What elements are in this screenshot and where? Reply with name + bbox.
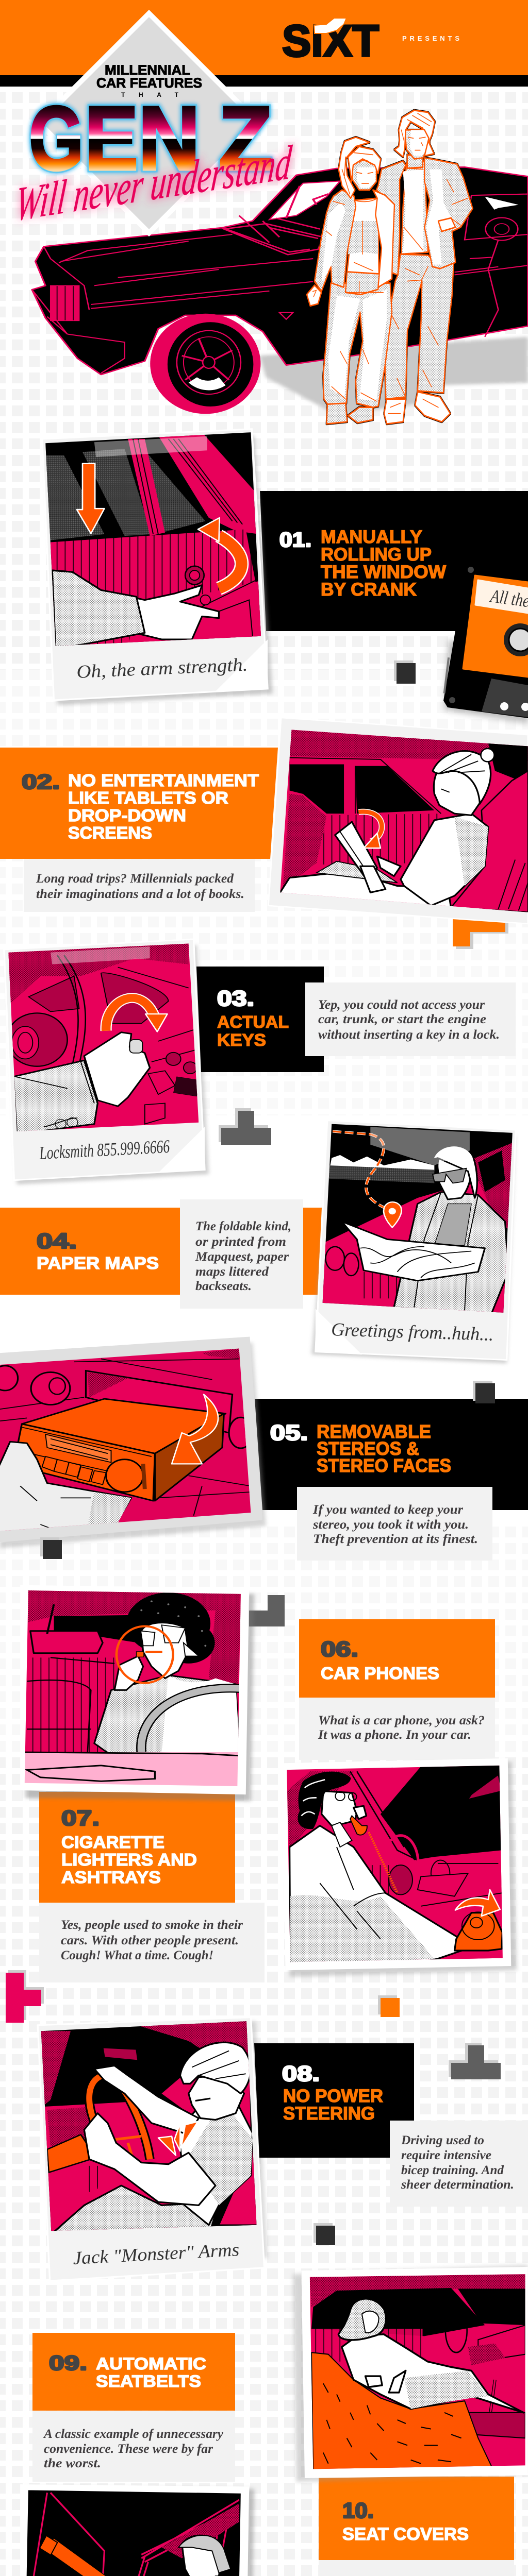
title small text: MILLENNIAL <box>105 62 190 78</box>
GEN Z: N <box>138 88 200 189</box>
black title box 08: 08. <box>282 2061 320 2086</box>
Will never understand <box>13 135 294 231</box>
black title box 05 <box>255 1399 528 1510</box>
black title box 03: KEYS <box>217 1030 266 1049</box>
black title box 05: STEREO FACES <box>317 1455 451 1476</box>
map <box>342 1222 485 1281</box>
orange title box: LIKE TABLETS OR <box>68 788 228 807</box>
shirt <box>94 1675 240 1755</box>
black title box: 01. <box>279 529 311 551</box>
seat <box>451 771 528 912</box>
black title box 08: STEERING <box>283 2104 375 2124</box>
belt <box>42 2538 167 2576</box>
orange title box 10 <box>319 2477 514 2560</box>
steering wheel <box>141 1688 242 1752</box>
description 07: Cough! What a time. Cough! <box>61 1948 213 1962</box>
GEN Z: E <box>85 88 138 189</box>
orange title box 10: SEAT COVERS <box>342 2524 469 2544</box>
fur cover <box>311 2352 491 2471</box>
title block <box>13 13 294 233</box>
header band <box>0 0 528 87</box>
description 05 <box>297 1487 492 1561</box>
photo 09 <box>20 2484 254 2576</box>
orange band 04 <box>0 1208 322 1295</box>
title small text: THAT <box>121 91 179 98</box>
description 06: What is a car phone, you ask? <box>318 1714 485 1727</box>
man legs and body <box>51 2185 219 2235</box>
black title box 08: NO POWER <box>283 2086 383 2106</box>
book <box>335 822 377 878</box>
icon: dark square bottom <box>40 1537 62 1559</box>
shirt <box>290 1826 462 1964</box>
orange title box 09: AUTOMATIC <box>96 2354 206 2373</box>
orange band 04: 04. <box>37 1229 77 1253</box>
orange title box <box>0 748 278 859</box>
black title box 05: 05. <box>270 1420 308 1445</box>
black title box 08 <box>254 2043 414 2158</box>
description 05: Theft prevention at its finest. <box>313 1532 478 1546</box>
description 04: The foldable kind, <box>195 1219 291 1233</box>
icon: dark square <box>314 2223 335 2245</box>
orange column <box>47 2134 96 2173</box>
panel 04: paper maps <box>0 1121 516 1364</box>
icon: pink tetris piece <box>6 1970 44 2023</box>
Will never understand: Will never understand <box>13 135 294 231</box>
panel 09: automatic seatbelts <box>20 2333 254 2576</box>
icon: small dark square <box>394 660 416 684</box>
panel 05: removable stereos <box>0 1337 528 1561</box>
panel 07: cigarette lighters and ashtrays <box>6 1585 265 2023</box>
icon: grey tetris T <box>219 1108 271 1145</box>
title small text <box>96 62 202 98</box>
hand with lighter <box>114 1656 143 1690</box>
icon: grey tetris T <box>449 2043 501 2079</box>
title small text: CAR FEATURES <box>96 75 202 91</box>
GEN Z: G <box>29 88 84 189</box>
description 10 <box>319 2560 514 2576</box>
caption 03: Locksmith 855.999.6666 <box>39 1136 170 1163</box>
torso <box>401 814 488 906</box>
description 05: stereo, you took it with you. <box>312 1518 469 1532</box>
arrow <box>172 1394 218 1464</box>
arms <box>94 2065 199 2134</box>
orange title box 09: 09. <box>49 2352 87 2375</box>
strain burst <box>158 2122 198 2155</box>
GEN Z: E <box>85 88 138 189</box>
description 09: the worst. <box>44 2456 101 2470</box>
photo 06 <box>280 1758 517 1977</box>
head <box>189 2075 244 2120</box>
description 03: car, trunk, or start the engine <box>318 1012 486 1026</box>
woman <box>342 2334 523 2413</box>
car body <box>32 167 528 375</box>
photo 10 <box>293 2265 528 2482</box>
orange title box 09 <box>32 2333 235 2411</box>
panel 10: seat covers <box>293 2265 528 2576</box>
description 07 <box>39 1903 265 1982</box>
GEN Z: N <box>138 88 200 189</box>
black title box 03: ACTUAL <box>217 1012 289 1031</box>
black title box: ROLLING UP <box>321 545 432 565</box>
orange title box 06: 06. <box>321 1637 358 1661</box>
legs <box>280 873 451 909</box>
rotary phone <box>455 1913 502 1951</box>
arm <box>52 570 219 646</box>
orange title box 06: CAR PHONES <box>321 1664 439 1683</box>
hero illustration: couple <box>307 110 473 424</box>
GEN Z: G <box>29 88 84 189</box>
panel 06: car phones <box>249 1595 517 1977</box>
description 03: without inserting a key in a lock. <box>318 1028 500 1042</box>
cassette tape <box>443 564 528 723</box>
icon: orange square <box>378 1995 400 2017</box>
description 09: convenience. These were by far <box>44 2442 213 2456</box>
phone receiver <box>350 1816 367 1835</box>
description 08: require intensive <box>401 2148 491 2162</box>
description 08: Driving used to <box>401 2133 484 2147</box>
description 02 <box>24 859 255 912</box>
black title box 03 <box>196 967 324 1072</box>
orange title box: 02. <box>22 771 60 793</box>
black title box: BY CRANK <box>321 580 417 600</box>
description 05: If you wanted to keep your <box>312 1503 463 1517</box>
photo 01 <box>40 429 273 705</box>
photo 07 <box>20 1585 254 1801</box>
description 04: maps littered <box>195 1265 269 1279</box>
description 07: cars. With other people present. <box>61 1934 239 1947</box>
GEN Z: Z <box>219 88 272 189</box>
description 09 <box>32 2411 235 2482</box>
sleeve <box>13 1060 97 1134</box>
description 02: Long road trips? Millennials packed <box>36 872 234 886</box>
hand <box>0 1442 131 1533</box>
orange title box: DROP-DOWN <box>68 806 186 825</box>
orange title box 07: ASHTRAYS <box>61 1868 161 1887</box>
black title box: THE WINDOW <box>321 562 446 582</box>
icon: dark square top <box>473 1381 495 1403</box>
GEN Z: Z <box>219 88 272 189</box>
description 06: It was a phone. In your car. <box>318 1728 471 1742</box>
photo 05 <box>0 1337 266 1548</box>
description 09: A classic example of unnecessary <box>43 2427 224 2441</box>
black title box <box>260 491 528 631</box>
man jacket <box>394 1192 508 1313</box>
panel 03: actual keys <box>4 939 516 1184</box>
GEN Z: G <box>29 88 84 189</box>
car shadow <box>259 337 528 415</box>
hero illustration: car <box>32 167 528 415</box>
black title box 05: STEREOS & <box>317 1438 419 1459</box>
icon: orange tetris piece <box>453 917 508 949</box>
orange title box 09: SEATBELTS <box>96 2372 201 2391</box>
description 03: Yep, you could not access your <box>318 998 485 1012</box>
face <box>141 1623 189 1679</box>
orange band 04: PAPER MAPS <box>37 1253 159 1273</box>
diamond <box>39 13 259 233</box>
hair and face <box>322 1791 357 1826</box>
caption 04: Greetings from..huh... <box>331 1319 494 1345</box>
description 04: or printed from <box>195 1235 286 1249</box>
orange title box: NO ENTERTAINMENT <box>68 771 259 790</box>
orange title box 06 <box>299 1619 495 1698</box>
radio <box>22 1399 226 1453</box>
photo 02 <box>268 718 528 924</box>
GEN Z: N <box>138 88 200 189</box>
panel 08: no power steering <box>37 2018 528 2281</box>
black title box: MANUALLY <box>321 527 422 547</box>
description 08: sheer determination. <box>401 2178 514 2192</box>
GEN Z: E <box>85 88 138 189</box>
man head <box>438 1159 470 1200</box>
photo 03 <box>4 939 209 1184</box>
orange title box: SCREENS <box>68 823 152 842</box>
caption 01: Oh, the arm strength. <box>76 654 248 682</box>
description 06 <box>299 1698 495 1760</box>
SIXT logo: SIXT <box>282 16 379 66</box>
hand <box>84 1032 150 1106</box>
panel 01: manually rolling up the window <box>40 429 528 723</box>
description 02: their imaginations and a lot of books. <box>36 887 244 901</box>
orange title box 10: 10. <box>342 2498 374 2522</box>
orange title box 07: CIGARETTE <box>61 1833 164 1852</box>
GEN Z <box>29 88 272 189</box>
description 03 <box>305 982 516 1056</box>
description 04: Mapquest, paper <box>195 1250 289 1264</box>
man figure <box>376 110 473 424</box>
woman figure <box>307 137 394 424</box>
lower strip <box>20 1752 246 1789</box>
Will never understand: Will never understand <box>13 135 294 231</box>
presents: PRESENTS <box>402 35 459 42</box>
caption 08: Jack "Monster" Arms <box>72 2239 240 2268</box>
car wheel <box>150 314 260 414</box>
wheel <box>89 2075 150 2159</box>
man <box>182 2535 222 2576</box>
photo 08 <box>37 2018 268 2281</box>
photo 04 <box>311 1121 516 1364</box>
description 04: backseats. <box>195 1279 252 1293</box>
black title box 05: REMOVABLE <box>317 1421 431 1442</box>
icon: grey tetris L <box>249 1595 285 1626</box>
black title box 03: 03. <box>217 986 254 1010</box>
gear shift <box>490 2380 495 2416</box>
afro <box>126 1592 210 1655</box>
description 08: bicep training. And <box>401 2163 504 2177</box>
GEN Z: Z <box>219 88 272 189</box>
orange title box 07 <box>39 1792 235 1903</box>
orange title box 07: 07. <box>61 1806 100 1830</box>
orange title box 07: LIGHTERS AND <box>61 1850 197 1869</box>
panel 02: no entertainment <box>0 718 528 949</box>
description 08 <box>390 2121 528 2207</box>
description 07: Yes, people used to smoke in their <box>61 1918 243 1932</box>
description 04 <box>180 1199 303 1309</box>
